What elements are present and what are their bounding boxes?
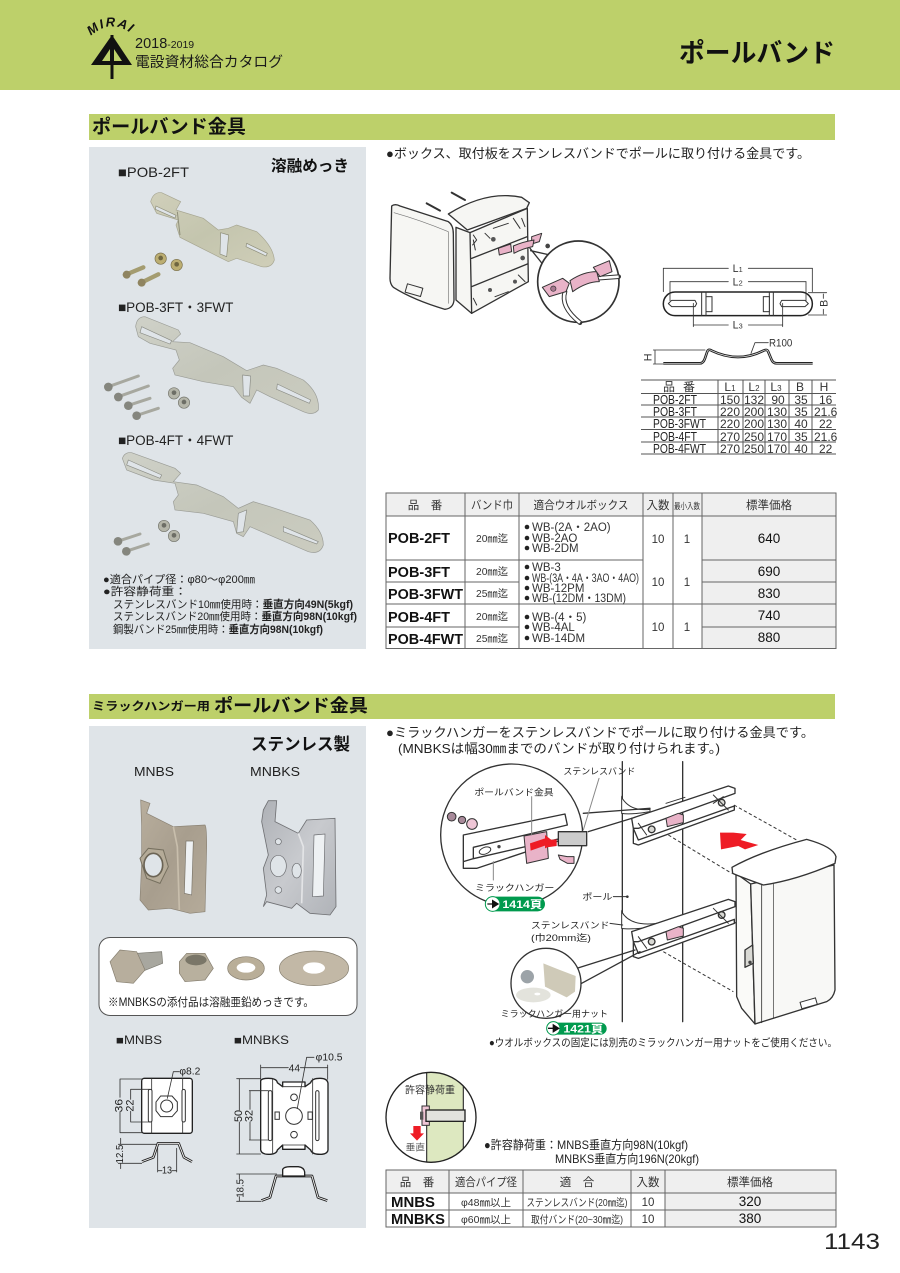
photo: POB-3FT bracket [136,317,318,413]
dimension drawing: top view [663,263,830,332]
photo: POB-2FT bracket [151,193,274,267]
table: POB price list: 25㎜迄 [476,632,508,645]
label POB-4FT: ■POB-4FT・4FWT [118,433,233,448]
label MNBKS: MNBKS [250,764,300,779]
table: POB price list: 740 [758,608,780,623]
load specification: ●許容静荷重：MNBS垂直方向98N(10kgf) [484,1137,688,1152]
diagram: MNBS dimensions [113,1066,201,1177]
table: dimensions: 220 [720,417,740,431]
callout labels: ミラックハンガー用ナット [501,1009,608,1019]
bands on pole [622,797,657,929]
table: POB price list: POB-3FWT [388,587,463,603]
specification notes [103,572,357,636]
accessory box [99,938,357,1016]
specification notes: ●適合パイプ径：φ80～φ200㎜ [103,572,255,586]
leader lines and dashes [663,805,797,992]
arrow tag: 1414頁 [485,897,545,911]
table: MNB price list: φ60㎜以上 [461,1214,511,1226]
table: dimensions: 40 [794,442,808,456]
WB model lists: WB-14DM [532,633,585,645]
table: dimensions: B [796,380,804,394]
table: dimensions: 40 [794,417,808,431]
table: MNB price list [386,1170,836,1228]
section heading: ミラックハンガー用 ポールバンド金具 [89,694,835,719]
callout labels: ステンレスバンド [563,767,635,777]
WB model lists: WB-2AO [532,533,577,545]
box with hood [732,839,836,1024]
photo: spring washer [228,957,264,980]
table: dimensions: 200 [744,417,764,431]
zoom circle: nut detail [511,948,581,1018]
description MNB: (MNBKSは幅30㎜までのバンドが取り付けられます。) [398,741,720,756]
callout labels: (巾20mm迄) [531,932,591,943]
section heading: ミラックハンガー用 ポールバンド金具: ミラックハンガー用 [92,699,210,713]
zoom leader lines [530,248,550,265]
dimension drawing: side view [642,338,813,364]
table: dimensions: 250 [744,442,764,456]
WB model lists: WB-(12DM・13DM) [532,593,626,605]
dimension drawing: side view: H [642,353,654,361]
table: dimensions: 90 [771,393,785,407]
catalog title: 電設資材総合カタログ [135,54,283,71]
table: MNB price list: 10 [642,1214,654,1226]
table: dimensions: 250 [744,430,764,444]
WB model lists [525,522,639,645]
table: MNB price list: MNBS [391,1195,435,1211]
table: POB price list: 1 [684,577,690,589]
table: dimensions: 22 [819,442,833,456]
panel: POB products [89,147,366,649]
box body [456,208,528,313]
table: MNB price list: ステンレスバンド(20㎜迄) [526,1196,628,1209]
table: dimensions: L3 [770,380,782,394]
logo: MIRAI: MIRAI [87,18,135,36]
table: dimensions [641,380,838,456]
dimension drawing: top view: L2 [733,276,743,288]
table: MNB price list: 適合パイプ径 [455,1175,517,1189]
diagram: MNBKS dimensions: 32 [244,1110,256,1122]
specification notes: ステンレスバンド10㎜使用時：垂直方向49N(5kgf) [113,597,353,611]
arrow tag: 1414頁: 1414頁 [502,898,542,911]
table: MNB price list: 10 [642,1197,654,1209]
table: dimensions: 35 [794,430,808,444]
photo: flat washer [279,951,349,986]
table: POB price list: 10 [652,577,664,589]
callout labels: ミラックハンガー [475,883,554,893]
dimension drawing: side view: R100 [769,338,792,350]
table: MNB price list: 標準価格 [727,1175,773,1189]
header band [0,0,900,90]
table: POB price list: 1 [684,622,690,634]
table: dimensions: 132 [744,393,764,407]
icon: load direction circle: 垂直 [406,1142,425,1153]
label POB-2FT: ■POB-2FT [118,164,189,180]
table: MNB price list: 320 [739,1194,761,1209]
dimension drawing: top view: L1 [733,263,743,275]
table: POB price list: 1 [684,534,690,546]
table: dimensions: L1 [724,380,736,394]
callout labels: ポールバンド金具 [474,787,554,798]
page number: 1143 [824,1229,880,1254]
table: POB price list: 20㎜迄 [476,565,508,578]
icon: load direction circle: 許容静荷重 [405,1083,455,1096]
table: dimensions: 130 [767,417,787,431]
table: dimensions: 21.6 [814,430,838,444]
accessory note: ※MNBKSの添付品は溶融亜鉛めっきです。 [108,996,314,1009]
page title: ポールバンド [679,38,835,68]
catalog year: 2018-2019 [135,36,194,52]
WB model lists: WB-(4・5) [532,612,586,624]
table: POB price list: 品 番 [408,499,443,512]
table: dimensions: 35 [794,405,808,419]
label MNBS: MNBS [134,764,174,779]
callout labels: ポール [582,892,612,902]
zoom circle [538,241,619,322]
table: dimensions: POB-2FT [653,392,697,407]
load specification [484,1137,699,1166]
dimension drawing: top view: B [818,300,830,307]
callout labels: ステンレスバンド [531,921,609,931]
diagram: MNBKS dimensions: 50 [233,1110,245,1122]
screws [427,193,465,211]
load specification: MNBKS垂直方向196N(20kgf) [555,1151,699,1166]
table: dimensions: POB-4FT [653,429,697,444]
table: dimensions: 200 [744,405,764,419]
pole [622,762,683,1022]
arrow tag: 1421頁 [547,1022,607,1035]
zoom circle: bracket detail [441,764,599,906]
table: POB price list: 830 [758,586,780,601]
photo: POB-2FT bolts and nuts [123,253,182,287]
table: MNB price list: MNBKS [391,1212,445,1228]
diagram: MNBKS dimensions: 18.5 [235,1179,246,1198]
table: dimensions: 22 [819,417,833,431]
photo: MNBKS bracket [262,801,336,915]
description MNB: ●ミラックハンガーをステンレスバンドでポールに取り付ける金具です。 [386,725,814,740]
photo: hex bolt [110,950,163,983]
table: MNB price list: 取付バンド(20~30㎜迄) [531,1213,623,1226]
section heading: ポールバンド金具: ポールバンド金具 [92,115,246,138]
table: dimensions: 35 [794,393,808,407]
table: dimensions: 16 [819,393,833,407]
table: MNB price list: φ48㎜以上 [461,1197,511,1209]
section heading: ミラックハンガー用 ポールバンド金具: ポールバンド金具 [214,695,368,716]
table: dimensions: 品 番 [663,380,695,394]
WB model lists: WB-(3A・4A・3AO・4AO) [532,573,639,585]
table: dimensions: 130 [767,405,787,419]
table: POB price list: 10 [652,534,664,546]
pink bracket in box [498,233,542,255]
table: POB price list: 適合ウオルボックス [534,498,628,512]
photo: MNBS bracket [140,800,207,913]
dimension drawing: top view: L3 [733,320,743,332]
icon: load direction circle [386,1070,476,1167]
label: MNBS diagram: ■MNBS [116,1035,162,1047]
diagram: MNBKS dimensions: φ10.5 [316,1052,343,1063]
table: dimensions: 170 [767,442,787,456]
note: nut usage: ●ウオルボックスの固定には別売のミラックハンガー用ナットをご使用ください。 [489,1036,837,1049]
table: POB price list: 690 [758,564,780,579]
diagram: MNBS dimensions: 22 [124,1100,136,1112]
logo: MIRAI [87,18,135,79]
diagram: MNBKS dimensions [233,1052,343,1201]
specification notes: ステンレスバンド20㎜使用時：垂直方向98N(10kgf) [113,609,357,623]
label: MNBKS diagram: ■MNBKS [234,1035,289,1047]
table: dimensions: L2 [748,380,760,394]
table: POB price list [386,493,836,648]
table: POB price list: 880 [758,630,780,645]
red arrow [720,833,758,849]
table: POB price list: 10 [652,622,664,634]
label POB-3FT: ■POB-3FT・3FWT [118,300,233,315]
description POB: ●ボックス、取付板をステンレスバンドでポールに取り付ける金具です。 [386,146,810,161]
photo: POB-4FT bracket [122,453,323,552]
table: dimensions: POB-3FWT [653,416,706,431]
specification notes: 鋼製バンド25㎜使用時：垂直方向98N(10kgf) [113,622,323,636]
description MNB [386,725,814,756]
table: dimensions: 21.6 [814,405,838,419]
table: POB price list: 640 [758,531,780,546]
table: POB price list: 25㎜迄 [476,587,508,600]
diagram: MNBS dimensions: 12.5 [115,1144,126,1163]
table: dimensions: 270 [720,442,740,456]
illustration: box mounted with band [390,193,619,323]
diagram: MNBS dimensions: φ8.2 [179,1066,201,1077]
table: dimensions: 220 [720,405,740,419]
specification notes: ●許容静荷重： [103,584,187,598]
table: dimensions: POB-4FWT [653,441,706,456]
WB model lists: WB-3 [532,562,561,574]
lower rail [632,899,735,958]
material label: ステンレス製 [251,735,350,754]
arrow tag: 1421頁: 1421頁 [563,1022,603,1035]
table: POB price list: 20㎜迄 [476,532,508,545]
table: POB price list: 入数 [646,499,670,512]
table: MNB price list: 380 [739,1211,761,1226]
callout labels [474,767,635,1019]
photo: nut [179,953,213,982]
table: POB price list: 20㎜迄 [476,610,508,623]
WB model lists: WB-4AL [532,622,575,634]
table: POB price list: POB-3FT [388,565,450,581]
photo: POB-4FT bolts and nuts [114,520,180,556]
photo: POB-3FT bolts and nuts [104,376,190,420]
table: MNB price list: 適 合 [560,1175,595,1189]
diagram: MNBS dimensions: 13 [162,1166,172,1177]
diagram: MNBKS dimensions: 44 [289,1063,300,1074]
illustration: Mirack hanger assembly [441,762,836,1035]
panel: MNB products [89,726,366,1228]
table: MNB price list: 入数 [636,1176,660,1189]
table: MNB price list: 品 番 [400,1176,435,1189]
table: POB price list: 標準価格 [746,498,792,512]
WB model lists: WB-2DM [532,543,579,555]
table: POB price list: POB-2FT [388,531,450,547]
diagram: MNBS dimensions: 36 [113,1099,125,1112]
table: dimensions: 270 [720,430,740,444]
WB model lists: WB-(2A・2AO) [532,522,611,534]
table: dimensions: H [820,380,828,394]
table: dimensions: POB-3FT [653,404,697,419]
finish label: 溶融めっき [271,157,349,175]
table: dimensions: 150 [720,393,740,407]
upper rail [632,786,735,845]
table: POB price list: バンド巾 [471,498,513,512]
section heading: ポールバンド金具 [89,114,835,140]
table: dimensions: 170 [767,430,787,444]
table: POB price list: POB-4FT [388,610,450,626]
WB model lists: WB-12PM [532,583,584,595]
table: POB price list: POB-4FWT [388,632,463,648]
box cover [390,205,454,309]
table: POB price list: 最小入数 [674,501,700,511]
